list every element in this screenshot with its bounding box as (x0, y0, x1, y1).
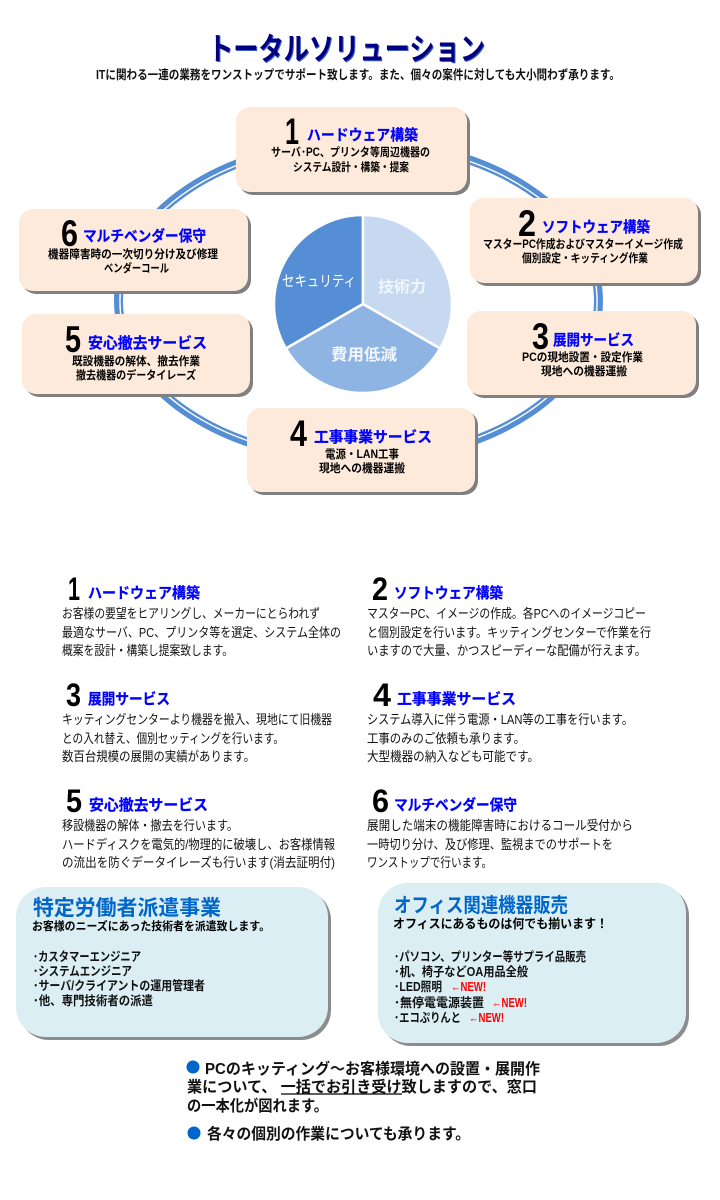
detail: software: マスターPC、イメージの作成。各PCへのイメージコピー (367, 606, 646, 621)
detail: construction: 4 (373, 677, 391, 713)
panel: staffing: お客様のニーズにあった技術者を派遣致します。 (32, 919, 270, 933)
detail: software: 2 (372, 571, 388, 607)
panel: service 2 (470, 198, 701, 286)
detail: hardware: ハードウェア構築 (88, 584, 200, 602)
title: トータルソリューション (209, 33, 486, 68)
panel: staffing: 特定労働者派遣事業 (33, 896, 221, 920)
panel: staffing: ･サーバ/クライアントの運用管理者 (33, 978, 205, 993)
panel: service 6: 6 (61, 213, 78, 254)
detail: removal: 移設機器の解体・撤去を行います。 (62, 818, 238, 833)
detail: construction (367, 677, 633, 764)
title: トータルソリューション (208, 32, 485, 67)
panel: office equipment: ･LED照明 (394, 980, 442, 994)
panel: service 5: 既設機器の解体、撤去作業 (72, 354, 200, 368)
closing note: individual work: 各々の個別の作業についても承ります。 (207, 1124, 470, 1143)
detail: deployment (62, 677, 332, 764)
icon: bullet (188, 1126, 200, 1140)
panel: office equipment: ←NEW! (451, 980, 486, 994)
detail: removal: 安心撤去サービス (89, 796, 208, 814)
panel: service 5 (22, 314, 253, 397)
closing note: one-stop (186, 1059, 540, 1115)
detail: multivendor: 一時切り分け、及び修理、監視までのサポートを (367, 837, 613, 852)
detail: software: いますので大量、かつスピーディーな配備が行えます。 (367, 643, 646, 658)
panel: service 1: システム設計・構築・提案 (293, 160, 409, 174)
panel: office equipment: ･無停電電源装置 (394, 995, 484, 1010)
detail: deployment: 数百台規模の展開の実績があります。 (62, 749, 255, 764)
slice: cost reduction (286, 304, 440, 393)
panel: service 4: 電源・LAN工事 (325, 447, 399, 461)
detail: deployment: 3 (66, 677, 81, 713)
panel: staffing (16, 887, 331, 1040)
panel: service 2: 個別設定・キッティング作業 (522, 251, 648, 265)
panel: service 4: 工事事業サービス (314, 428, 432, 446)
panel: service 1: 1 (285, 111, 299, 152)
panel: office equipment (378, 883, 689, 1046)
panel: service 1: ハードウェア構築 (307, 126, 418, 144)
panel: staffing: ･カスタマーエンジニア (33, 950, 141, 964)
panel: service 2: ソフトウェア構築 (542, 218, 650, 236)
panel: office equipment: ･エコぷりんと (394, 1011, 461, 1025)
detail: multivendor: ワンストップで行います。 (367, 855, 492, 870)
panel: service 5: 撤去機器のデータイレーズ (76, 368, 196, 382)
closing note: one-stop: 業について、 一括でお引き受け致しますので、窓口 (187, 1077, 537, 1096)
panel: service 3: 3 (532, 316, 549, 357)
detail: software: ソフトウェア構築 (394, 584, 503, 602)
detail: hardware: 1 (68, 571, 80, 607)
icon: bullet (186, 1060, 200, 1074)
panel: service 3: PCの現地設置・設定作業 (522, 350, 643, 364)
panel: service 5: 安心撤去サービス (88, 334, 207, 352)
detail: deployment: 展開サービス (88, 690, 170, 708)
panel: service 6: 機器障害時の一次切り分け及び修理 (48, 247, 218, 261)
panel: office equipment: オフィスにあるものは何でも揃います！ (393, 916, 608, 931)
detail: deployment: との入れ替え、個別セッティングを行います。 (62, 731, 284, 746)
label: security: セキュリティ (282, 273, 356, 290)
slice: security (274, 215, 363, 348)
detail: hardware: お客様の要望をヒアリングし、メーカーにとらわれず (62, 606, 320, 621)
detail: multivendor: 6 (372, 783, 389, 819)
detail: construction: 工事事業サービス (397, 690, 516, 708)
slice: technical skill (363, 215, 452, 348)
panel: office equipment: ←NEW! (469, 1011, 504, 1025)
detail: deployment: キッティングセンターより機器を搬入、現地にて旧機器 (62, 712, 332, 727)
ring connecting services (118, 142, 598, 460)
label: technical skill: 技術力 (378, 277, 426, 296)
detail: multivendor: 展開した端末の機能障害時におけるコール受付から (367, 818, 633, 833)
detail: removal (62, 783, 335, 870)
panel: staffing: ･システムエンジニア (33, 964, 132, 978)
detail: multivendor: マルチベンダー保守 (394, 796, 517, 814)
detail: construction: 大型機器の納入なども可能です。 (367, 749, 539, 764)
panel: service 4: 4 (290, 413, 307, 454)
panel: office equipment: ←NEW! (492, 996, 527, 1010)
panel: staffing: ･他、専門技術者の派遣 (33, 993, 153, 1008)
label: cost reduction: 費用低減 (331, 346, 397, 364)
panel: office equipment: ･机、椅子などOA用品全般 (394, 964, 528, 979)
closing note: one-stop: の一本化が図れます。 (187, 1096, 328, 1115)
panel: service 1: サーバ･PC、プリンタ等周辺機器の (271, 145, 430, 159)
detail: software (367, 571, 651, 658)
panel: service 3: 展開サービス (553, 331, 634, 349)
panel: office equipment: オフィス関連機器販売 (394, 893, 568, 917)
detail: construction: 工事のみのご依頼も承ります。 (367, 731, 525, 746)
panel: service 4 (247, 408, 478, 495)
detail: hardware: 概案を設計・構築し提案致します。 (62, 643, 233, 658)
detail: removal: ハードディスクを電気的/物理的に破壊し、お客様情報 (62, 837, 335, 852)
panel: service 5: 5 (65, 319, 81, 360)
panel: service 3 (467, 311, 699, 398)
subtitle: ITに関わる一連の業務をワンストップでサポート致します。また、個々の案件に対しても大小問わず承ります。 (96, 67, 620, 82)
panel: service 4: 現地への機器運搬 (319, 461, 405, 475)
panel: service 6: ベンダーコール (104, 261, 169, 275)
panel: service 2: マスターPC作成およびマスターイメージ作成 (483, 237, 683, 251)
panel: service 6: マルチベンダー保守 (83, 227, 206, 245)
detail: software: と個別設定を行います。キッティングセンターで作業を行 (367, 625, 651, 640)
detail: construction: システム導入に伴う電源・LAN等の工事を行います。 (367, 712, 633, 727)
panel: service 6 (19, 209, 251, 294)
panel: service 2: 2 (518, 203, 536, 244)
detail: multivendor (367, 783, 633, 870)
panel: office equipment: ･パソコン、プリンター等サプライ品販売 (394, 949, 586, 964)
detail: removal: の流出を防ぐデータイレーズも行います(消去証明付) (62, 855, 335, 870)
detail: removal: 5 (66, 783, 82, 819)
detail: hardware: 最適なサーバ、PC、プリンタ等を選定、システム全体の (62, 625, 341, 640)
panel: service 1 (236, 107, 470, 195)
panel: service 3: 現地への機器運搬 (541, 364, 627, 378)
detail: hardware (62, 571, 341, 658)
pie chart (274, 215, 452, 393)
closing note: one-stop: PCのキッティング～お客様環境への設置・展開作 (205, 1059, 540, 1078)
